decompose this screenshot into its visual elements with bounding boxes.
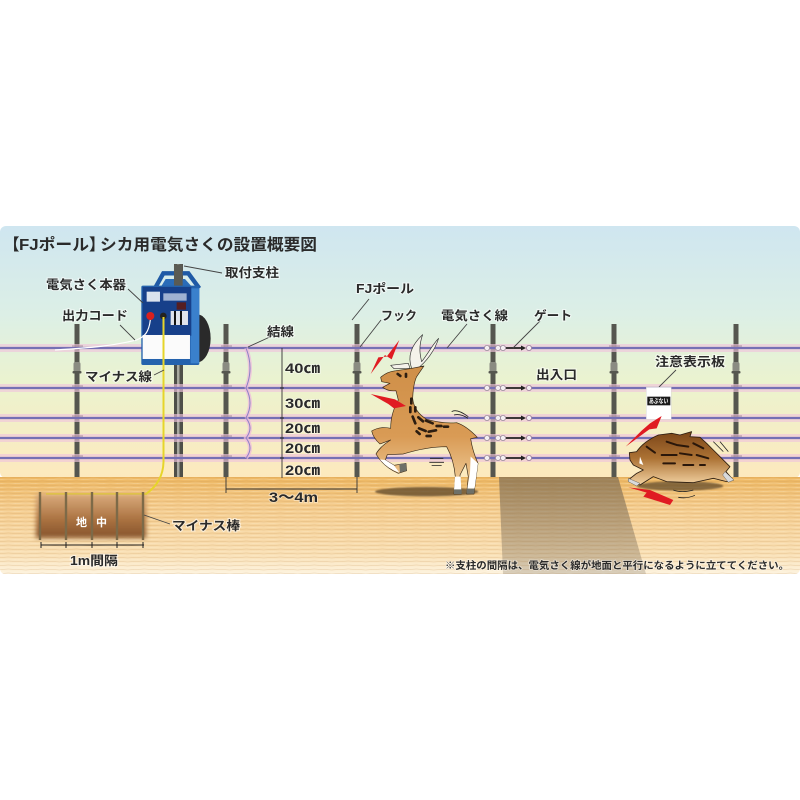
dimension label: 20㎝ [285, 462, 320, 478]
underground label: 中 [96, 515, 107, 529]
underground section [36, 492, 146, 548]
labels [46, 265, 726, 568]
label: 電気さく本器 [46, 277, 127, 292]
leader lines [120, 266, 676, 524]
dimension line [280, 348, 284, 478]
title [4, 235, 317, 254]
icon: boar [628, 432, 734, 498]
pole spacing dimension [226, 477, 357, 505]
dimension label: 3〜4m [269, 489, 318, 505]
dimension label: 20㎝ [285, 420, 320, 436]
minus cable [46, 317, 164, 494]
electric fence wires [0, 348, 800, 458]
shock bolt [628, 487, 673, 505]
label: ゲート [534, 308, 572, 323]
label: FJポール [356, 281, 415, 296]
label: マイナス棒 [172, 518, 241, 533]
title: 】 [89, 236, 105, 254]
title: FJポール [19, 236, 89, 254]
fence poles [72, 324, 742, 477]
footnote: ※支柱の間隔は、電気さく線が地面と平行になるように立ててください。 [445, 559, 789, 572]
mounting pole [174, 264, 183, 477]
dimension label: 40㎝ [285, 360, 320, 376]
icon: deer [372, 335, 478, 496]
ground rods [40, 492, 143, 540]
label: フック [381, 309, 417, 323]
title: シカ用電気さくの設置概要図 [100, 235, 317, 254]
label: マイナス線 [85, 369, 153, 384]
label: 注意表示板 [655, 354, 726, 369]
buried earth block [36, 494, 146, 538]
gate handles [484, 345, 532, 461]
rod spacing arrows [41, 542, 144, 548]
panel: background sky [0, 226, 800, 478]
binding wires [246, 348, 250, 458]
label: 結線 [267, 324, 295, 339]
icon: red shock bolts on boar [626, 416, 673, 505]
gate passage shadow [499, 477, 646, 574]
warning sign [646, 387, 671, 419]
sign text: あぶない [649, 396, 668, 405]
icon: electric fence energizer [55, 264, 211, 365]
label: 出入口 [536, 368, 577, 382]
label: 出力コード [62, 308, 128, 323]
panel: ground [0, 477, 800, 574]
icon: red shock bolts on deer [371, 340, 406, 408]
wire height dimensions [280, 348, 320, 478]
dimension label: 20㎝ [285, 440, 320, 456]
shock bolt [371, 340, 399, 374]
dimension line [226, 477, 357, 493]
underground label: 地 [76, 515, 87, 529]
label: 1m間隔 [70, 554, 118, 568]
label: 電気さく線 [441, 308, 509, 323]
label: 取付支柱 [225, 265, 280, 280]
shock bolt [626, 416, 662, 447]
shock bolt [371, 394, 406, 408]
dimension label: 30㎝ [285, 395, 320, 411]
title: 【 [4, 236, 20, 254]
